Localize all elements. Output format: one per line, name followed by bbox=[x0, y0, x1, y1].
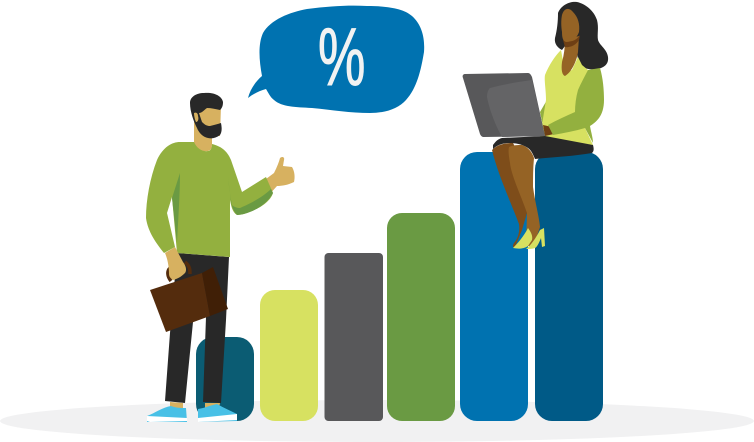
woman neck chest bbox=[562, 36, 579, 76]
woman neck shadow bbox=[563, 35, 580, 47]
speech bubble with percent sign bbox=[248, 6, 424, 113]
right shoe sole bbox=[198, 414, 237, 422]
woman face bbox=[561, 9, 579, 42]
left hand bbox=[165, 247, 186, 280]
woman with laptop bbox=[463, 2, 608, 249]
woman top bbox=[540, 50, 593, 145]
man ear bbox=[194, 113, 198, 122]
woman far leg bbox=[492, 143, 527, 247]
woman hand bbox=[543, 125, 554, 136]
left shoe sole bbox=[147, 416, 187, 422]
laptop lighter panel bbox=[487, 80, 545, 137]
bar 2 lime bbox=[260, 290, 318, 421]
woman hair bbox=[555, 2, 608, 69]
left shoe bbox=[147, 406, 187, 422]
woman near leg bbox=[509, 145, 540, 248]
bar 1 teal bbox=[196, 337, 254, 421]
right yellow heel bbox=[526, 228, 545, 249]
percent sign: % bbox=[318, 10, 365, 103]
bar chart bbox=[196, 152, 603, 421]
sweater bbox=[146, 142, 273, 257]
briefcase side bbox=[202, 267, 228, 316]
briefcase handle bbox=[168, 262, 190, 281]
man with briefcase bbox=[146, 93, 295, 422]
bubble shape bbox=[248, 6, 424, 113]
bar 3 grey bbox=[324, 253, 383, 421]
ground shadow bbox=[0, 400, 754, 442]
woman far arm bbox=[540, 100, 548, 126]
trousers bbox=[165, 253, 229, 403]
woman skirt bbox=[493, 136, 594, 159]
bar 5 blue bbox=[460, 152, 528, 421]
right hand thumbs up bbox=[262, 157, 295, 196]
woman arm bbox=[548, 68, 604, 143]
man hair and beard bbox=[190, 93, 223, 138]
man neck and face bbox=[194, 103, 221, 151]
right shoe bbox=[198, 404, 237, 422]
ankles bbox=[170, 402, 220, 411]
bar 4 green bbox=[387, 213, 455, 421]
sweater shadows bbox=[172, 173, 273, 243]
laptop bbox=[463, 73, 545, 137]
left yellow heel bbox=[513, 228, 532, 249]
briefcase bbox=[150, 273, 210, 332]
bar 6 dark blue bbox=[535, 152, 603, 421]
